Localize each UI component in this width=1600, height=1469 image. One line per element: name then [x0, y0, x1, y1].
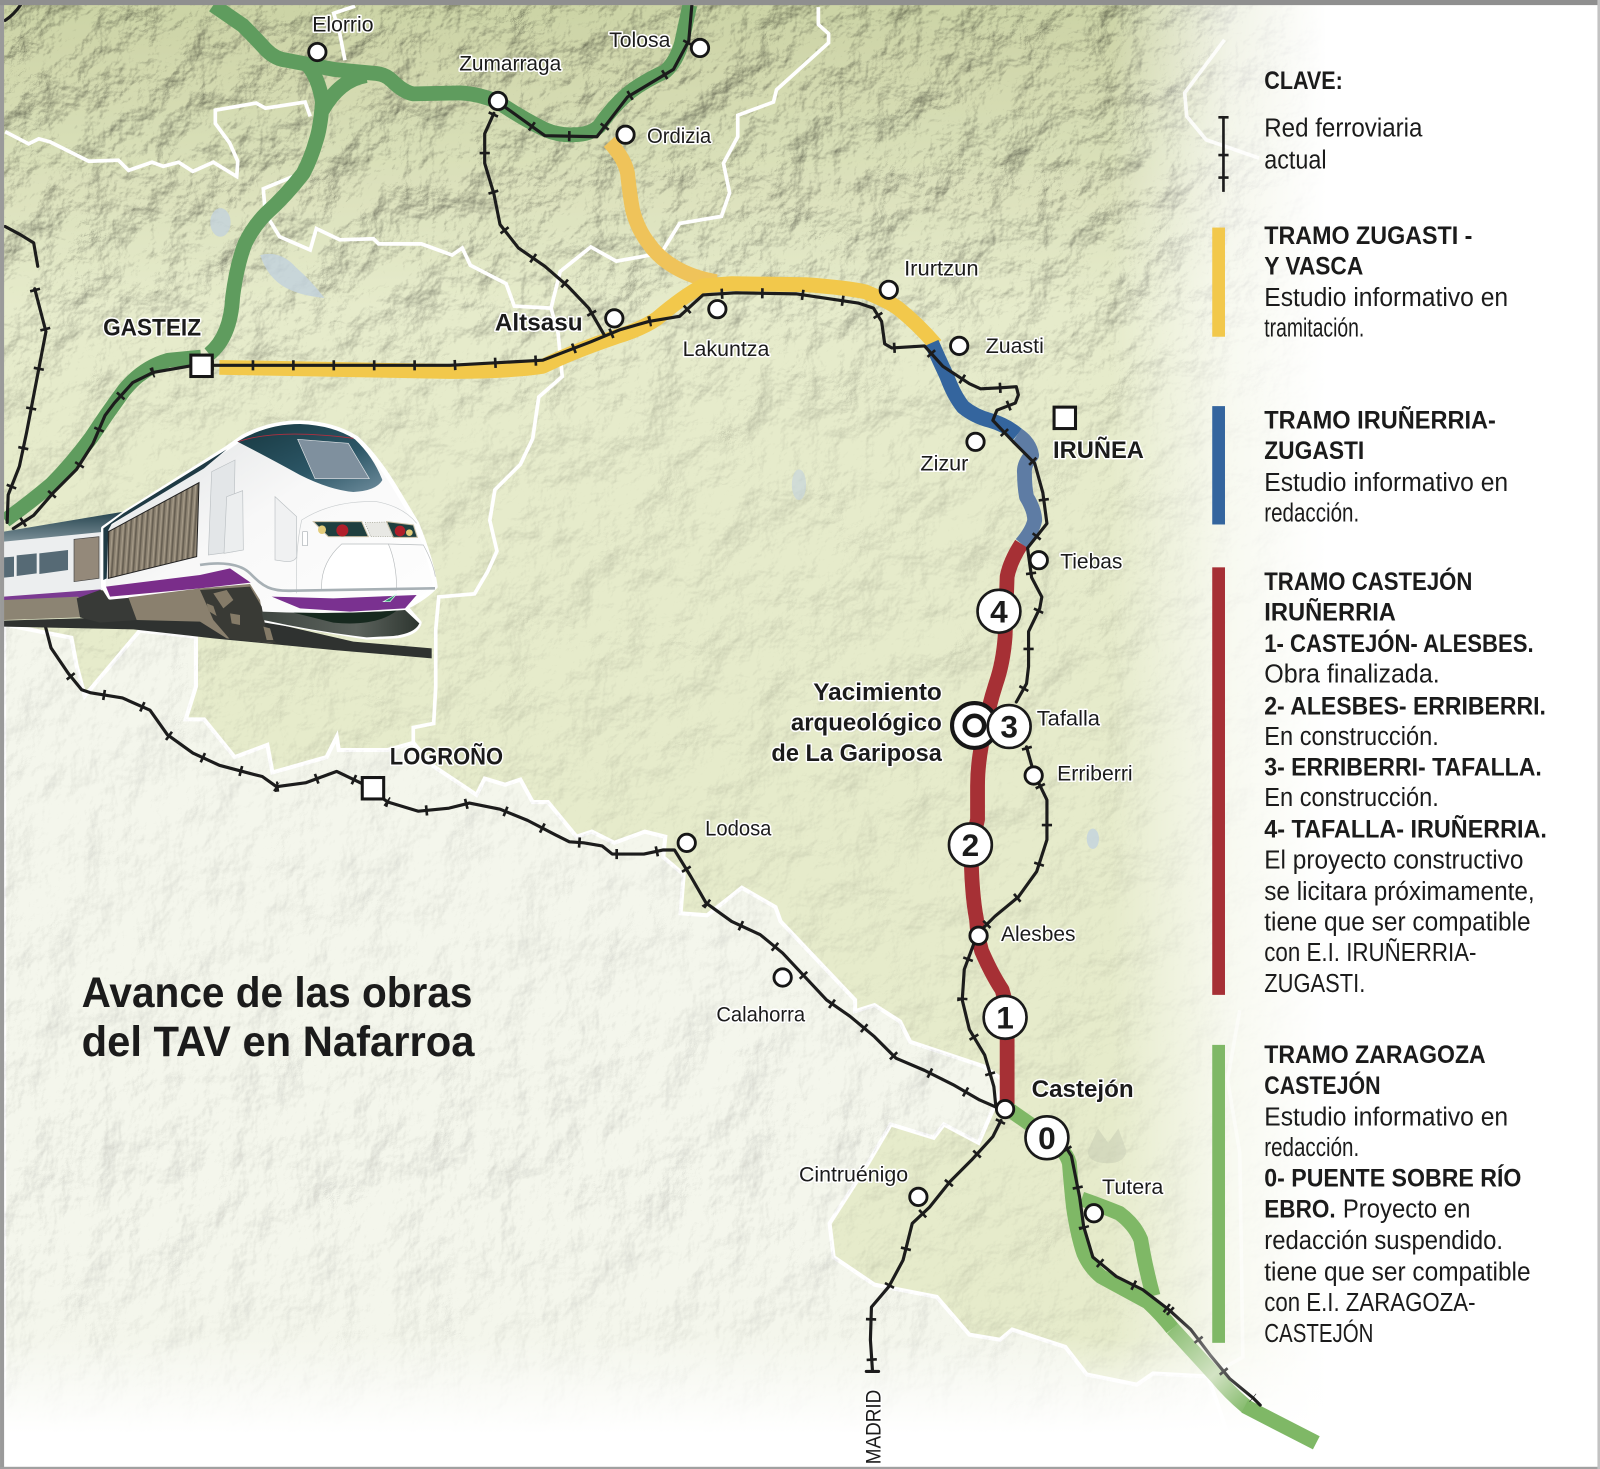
legend: heading: CLAVE: — [1264, 67, 1343, 95]
icon: archaeological site marker — [952, 703, 997, 748]
numbered route markers: 0 — [1038, 1120, 1056, 1156]
place labels: Irurtzun — [904, 257, 979, 281]
legend: Castejón - Iruñerria: tiene que ser compatible — [1264, 909, 1531, 937]
route: Zaragoza - Castejón, light green — [1007, 1108, 1316, 1443]
legend: Iruñerria - Zugasti: redacción. — [1264, 499, 1359, 527]
legend: Zaragoza - Castejón: EBRO. — [1264, 1195, 1336, 1223]
numbered route markers: 1 — [996, 1000, 1014, 1036]
lead car body — [103, 423, 435, 637]
route: Zugasti - Y vasca, yellow — [219, 142, 936, 371]
legend: Castejón - Iruñerria: 1- CASTEJÓN- ALESBES. — [1264, 628, 1534, 658]
place labels: Calahorra — [716, 1002, 805, 1026]
place labels: Cintruénigo — [799, 1163, 908, 1187]
existing rail network — [5, 5, 1260, 1405]
place labels: Tafalla — [1037, 706, 1100, 730]
terrain background — [4, 5, 1306, 1408]
route: Iruñerria - Zugasti, blue — [932, 343, 1035, 544]
legend: Castejón - Iruñerria: 2- ALESBES- ERRIBERRI. — [1264, 692, 1546, 720]
place labels: Ordizia — [647, 124, 711, 148]
major city labels: Castejón — [1032, 1076, 1134, 1103]
legend: Castejón - Iruñerria: IRUÑERRIA — [1264, 596, 1396, 626]
title: del TAV en Nafarroa — [82, 1018, 476, 1066]
place labels: Zizur — [920, 451, 968, 475]
route: Castejón - Iruñerria, red — [971, 544, 1021, 1106]
trailing carriage — [4, 512, 137, 623]
legend: Zaragoza - Castejón — [1212, 1041, 1531, 1348]
numbered route markers — [949, 590, 1068, 1159]
legend: Zaragoza - Castejón: redacción. — [1264, 1134, 1359, 1162]
regional borders — [5, 6, 1259, 1377]
legend: Zugasti - Y vasca: Estudio informativo en — [1264, 284, 1508, 312]
place labels: Tiebas — [1060, 549, 1122, 573]
legend: Iruñerria - Zugasti — [1212, 405, 1508, 527]
side panels — [208, 460, 235, 555]
legend: Zugasti - Y vasca: TRAMO ZUGASTI - — [1264, 222, 1472, 250]
major city labels: Altsasu — [495, 310, 583, 337]
legend: Castejón - Iruñerria: El proyecto constructivo — [1264, 846, 1523, 874]
legend: Castejón - Iruñerria: En construcción. — [1264, 784, 1439, 812]
legend: Castejón - Iruñerria: TRAMO CASTEJÓN — [1264, 566, 1472, 596]
legend: Zaragoza - Castejón: tiene que ser compatible — [1264, 1259, 1531, 1287]
place labels: Alesbes — [1001, 922, 1076, 946]
purple stripes — [106, 568, 251, 597]
place labels: Zumarraga — [459, 51, 561, 75]
major city labels: IRUÑEA — [1053, 436, 1144, 464]
legend: Castejón - Iruñerria: Obra finalizada. — [1264, 661, 1440, 689]
legend: Iruñerria - Zugasti: ZUGASTI — [1264, 437, 1364, 465]
place labels: Elorrio — [312, 13, 373, 37]
legend: existing rail network: Red ferroviaria — [1264, 115, 1423, 143]
archaeological site label — [771, 679, 942, 767]
archaeological site label: de La Gariposa — [771, 740, 942, 767]
legend: Zugasti - Y vasca: tramitación. — [1264, 315, 1364, 343]
place labels — [312, 13, 1163, 1464]
track and shadow — [4, 617, 432, 658]
major city labels: GASTEIZ — [103, 315, 201, 342]
legend: Zaragoza - Castejón: redacción suspendido. — [1264, 1227, 1503, 1255]
legend: Castejón - Iruñerria: se licitara próximamente, — [1264, 878, 1535, 906]
legend: Iruñerria - Zugasti: Estudio informativo en — [1264, 469, 1508, 497]
legend: Castejón - Iruñerria: En construcción. — [1264, 723, 1439, 751]
place labels: Zuasti — [986, 334, 1044, 358]
legend: Zugasti - Y vasca: Y VASCA — [1264, 252, 1363, 280]
place labels: Lodosa — [705, 817, 772, 841]
numbered route markers: 3 — [1000, 709, 1018, 745]
legend: Zaragoza - Castejón: CASTEJÓN — [1264, 1319, 1373, 1348]
legend: Zaragoza - Castejón: 0- PUENTE SOBRE RÍO — [1264, 1164, 1521, 1193]
legend: Zaragoza - Castejón: TRAMO ZARAGOZA — [1264, 1041, 1486, 1069]
legend: Castejón - Iruñerria: 4- TAFALLA- IRUÑERRIA. — [1264, 814, 1547, 844]
place labels: Tolosa — [609, 28, 670, 52]
cab windscreen — [237, 424, 382, 492]
legend: existing rail network: actual — [1264, 146, 1327, 174]
headlights — [313, 522, 368, 537]
major city labels: LOGROÑO — [390, 742, 503, 770]
legend: existing rail network — [1218, 115, 1423, 192]
legend — [1212, 67, 1547, 1348]
legend: Zaragoza - Castejón: Estudio informativo en — [1264, 1103, 1508, 1131]
place labels: Lakuntza — [683, 337, 769, 361]
icon: high speed train — [4, 423, 435, 658]
chin — [262, 610, 419, 637]
route: Y vasca network, dark green — [5, 5, 690, 520]
title — [82, 969, 476, 1066]
legend: Castejón - Iruñerria: ZUGASTI. — [1264, 970, 1365, 998]
legend: Castejón - Iruñerria — [1212, 566, 1547, 998]
place labels: Erriberri — [1057, 762, 1133, 786]
legend: Iruñerria - Zugasti: TRAMO IRUÑERRIA- — [1264, 405, 1496, 435]
archaeological site label: arqueológico — [791, 710, 942, 737]
archaeological site label: Yacimiento — [813, 679, 942, 706]
nose panels — [322, 544, 397, 590]
skirt and bogie — [128, 584, 273, 643]
legend: Castejón - Iruñerria: 3- ERRIBERRI- TAFALLA. — [1264, 753, 1542, 781]
legend: Castejón - Iruñerria: con E.I. IRUÑERRIA- — [1264, 938, 1477, 967]
legend: Zugasti - Y vasca — [1212, 222, 1508, 343]
numbered route markers: 4 — [990, 593, 1008, 629]
title: Avance de las obras — [82, 969, 472, 1017]
legend: Zaragoza - Castejón: Proyecto en — [1343, 1195, 1470, 1223]
place labels: Tutera — [1102, 1175, 1163, 1199]
major city labels — [103, 310, 1144, 1103]
legend: Zaragoza - Castejón: CASTEJÓN — [1264, 1070, 1381, 1100]
station markers — [191, 39, 1103, 1222]
legend: Zaragoza - Castejón: con E.I. ZARAGOZA- — [1264, 1289, 1475, 1317]
numbered route markers: 2 — [962, 827, 979, 863]
place labels: MADRID — [862, 1390, 886, 1464]
